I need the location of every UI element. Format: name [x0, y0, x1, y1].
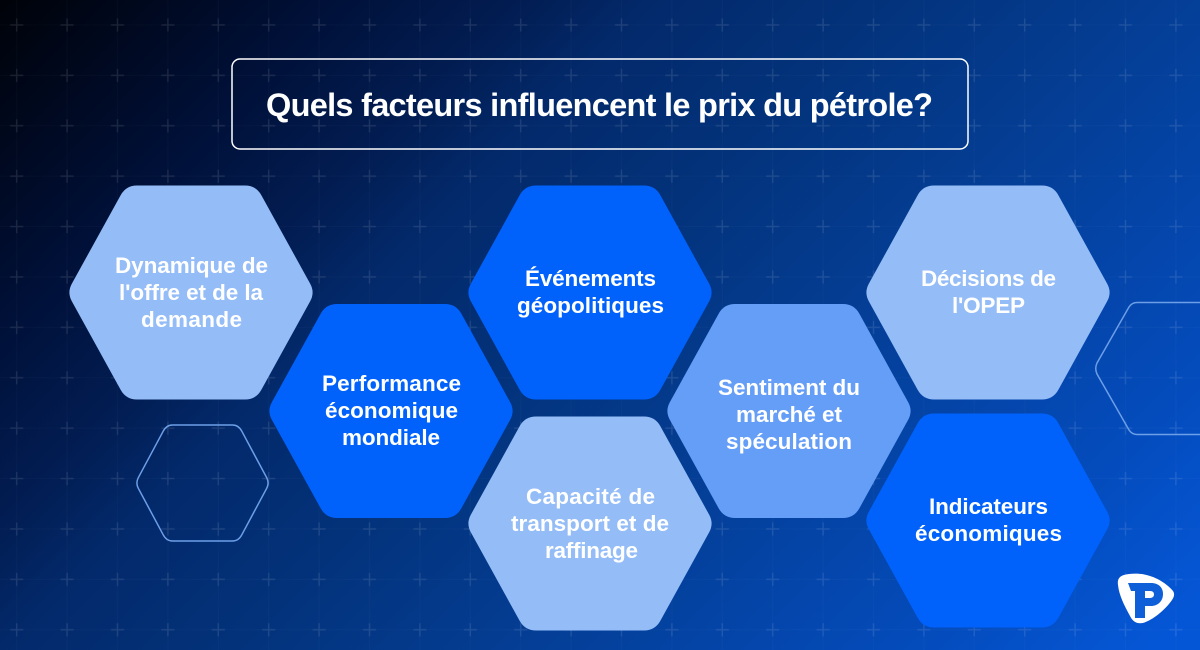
- hexagon: Événements géopolitiques: [468, 186, 712, 400]
- title: Quels facteurs influencent le prix du pétrole?: [266, 87, 933, 123]
- hexagon: Capacité de transport et de raffinage: raffinage: [545, 538, 638, 563]
- hexagon: Performance économique mondiale: Performance: [322, 371, 461, 396]
- hexagon: Capacité de transport et de raffinage: [468, 416, 712, 630]
- hexagon: Décisions de l'OPEP: l'OPEP: [952, 293, 1025, 318]
- hexagon: Sentiment du marché et spéculation: spéculation: [726, 429, 852, 454]
- hexagon: Sentiment du marché et spéculation: marché et: [736, 402, 842, 427]
- outline hexagon: lower left: [137, 425, 268, 541]
- hexagon: Décisions de l'OPEP: Décisions de: [921, 266, 1056, 291]
- hexagon: Événements géopolitiques: géopolitiques: [517, 293, 664, 318]
- title box: [232, 59, 968, 149]
- hexagon: Performance économique mondiale: [269, 304, 513, 518]
- hexagon: Dynamique de l'offre et de la demande: demande: [141, 307, 242, 332]
- icon: Pepperstone logo: [1118, 574, 1174, 623]
- hexagon: Événements géopolitiques: Événements: [525, 266, 656, 291]
- hexagon: Indicateurs économiques: économiques: [915, 521, 1062, 546]
- outline hexagon: right edge: [1096, 302, 1200, 434]
- hexagon: Indicateurs économiques: Indicateurs: [929, 494, 1048, 519]
- hexagon: Sentiment du marché et spéculation: [667, 304, 911, 518]
- hexagon: Performance économique mondiale: économique: [325, 398, 458, 423]
- hexagon: Indicateurs économiques: [866, 414, 1110, 628]
- hexagon: Dynamique de l'offre et de la demande: Dynamique de: [115, 253, 268, 278]
- hexagon: Dynamique de l'offre et de la demande: [69, 186, 313, 400]
- hexagon: Sentiment du marché et spéculation: Sentiment du: [718, 375, 860, 400]
- hexagon: Capacité de transport et de raffinage: Capacité de: [526, 484, 655, 509]
- hexagon: Dynamique de l'offre et de la demande: l'offre et de la: [119, 280, 263, 305]
- hexagon: Capacité de transport et de raffinage: transport et de: [511, 511, 669, 536]
- hexagon: Performance économique mondiale: mondiale: [342, 425, 440, 450]
- hexagon: Décisions de l'OPEP: [866, 186, 1110, 400]
